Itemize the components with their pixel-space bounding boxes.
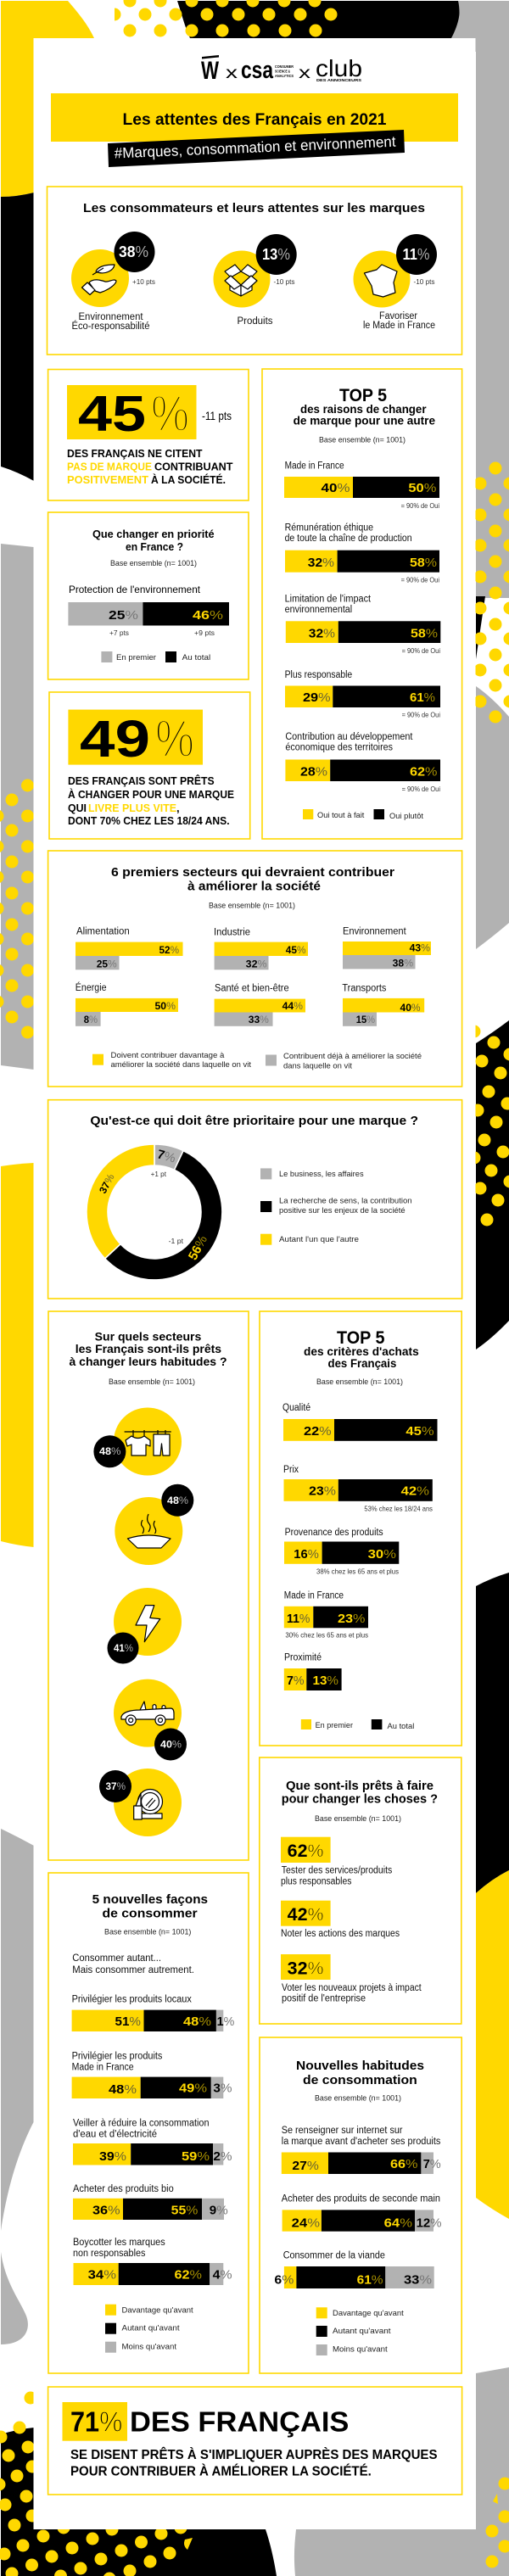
big number	[68, 710, 203, 768]
stat: 62%: 62%	[288, 1841, 324, 1861]
stat: environnement 38%: +10 pts	[132, 277, 155, 286]
heading: à améliorer la société	[187, 880, 321, 894]
bar: made in france: Made in France	[285, 461, 344, 472]
stat: 62%: Tester des services/produits	[282, 1866, 393, 1876]
bar: se renseigner: la marque avant d'acheter ses produits	[282, 2137, 441, 2147]
bars: environnement: 43%	[410, 942, 430, 954]
bar: proximité: Proximité	[284, 1652, 322, 1662]
statement	[68, 774, 234, 827]
stat: 32%: 32%	[288, 1959, 324, 1978]
heading	[111, 866, 394, 894]
bars: santé et bien-être: 44%	[282, 1000, 303, 1012]
bar: eau et électricité: 59%	[182, 2149, 210, 2164]
bar: provenance des produits: 30%	[368, 1547, 396, 1562]
logos: x	[226, 64, 238, 82]
legend: Autant qu'avant	[333, 2327, 391, 2336]
legend: Doivent contribuer davantage à	[110, 1051, 225, 1060]
bar: made in france: 48%	[109, 2082, 137, 2097]
bar: prix: 42%	[401, 1484, 429, 1498]
panel: que sont-ils prêts à faire: Base ensemble (n= 1001)	[315, 1814, 401, 1824]
bar: limitation de l'impact: 58%	[411, 626, 438, 641]
stat: 42%: 42%	[288, 1905, 324, 1925]
logos: W	[201, 57, 219, 85]
bar: contribution au développement: 62%	[410, 765, 438, 779]
bar: made in france: 49%	[179, 2081, 207, 2095]
bar: boycotter: 62%	[175, 2268, 202, 2283]
big number: %	[155, 710, 194, 768]
icon: lightning bolt	[136, 1606, 160, 1642]
stat: environnement 38%: 38%	[119, 243, 148, 260]
bar: produits bio: 9%	[210, 2203, 228, 2217]
legend	[260, 1168, 412, 1245]
legend: Au total	[387, 1722, 414, 1731]
big number: 45	[78, 386, 146, 442]
heading: 6 premiers secteurs qui devraient contribuer	[111, 866, 394, 880]
bar: prix: 53% chez les 18/24 ans	[364, 1504, 433, 1512]
panel: secteurs prêts à changer	[48, 1311, 249, 1860]
bar: boycotter: non responsables	[73, 2249, 146, 2259]
stat: made in france 11%: le Made in France	[363, 321, 435, 331]
logos	[201, 55, 362, 85]
heading	[92, 528, 215, 553]
heading: Sur quels secteurs	[95, 1329, 202, 1343]
heading: Les consommateurs et leurs attentes sur les marques	[83, 202, 425, 215]
headline: DES FRANÇAIS	[130, 2406, 349, 2438]
panel: que changer en priorité	[48, 512, 249, 679]
bar: se renseigner: 7%	[423, 2157, 441, 2171]
bar: contribution au développement: 28%	[300, 765, 327, 779]
panel: 5 nouvelles façons de consommer: Base ensemble (n= 1001)	[104, 1928, 191, 1937]
heading: 5 nouvelles façons	[92, 1893, 208, 1907]
bars: alimentation: Alimentation	[76, 927, 130, 937]
bar: plus responsable: = 90% de Oui	[402, 711, 440, 719]
stat: 62%	[281, 1837, 393, 1886]
big number: %	[151, 385, 189, 442]
legend: Moins qu'avant	[333, 2345, 388, 2355]
legend: Oui plutôt	[389, 812, 423, 821]
bar: viande: Consommer de la viande	[283, 2251, 385, 2261]
sector: cars 40%: 40%	[160, 1739, 182, 1751]
heading	[294, 386, 435, 427]
intro text: Consommer autant...	[72, 1953, 161, 1964]
bar: produits locaux: Privilégier les produits locaux	[72, 1994, 192, 2004]
bar chart: +9 pts	[194, 629, 215, 637]
bar: plus responsable: 61%	[410, 690, 435, 705]
heading: des raisons de changer	[300, 403, 427, 416]
statement: À CHANGER POUR UNE MARQUE	[68, 788, 234, 801]
bar: se renseigner: 66%	[390, 2157, 417, 2171]
sector: cars 40%	[114, 1679, 187, 1761]
logos: csa	[241, 57, 274, 84]
panel: secteurs prêts à changer: Base ensemble (n= 1001)	[109, 1377, 195, 1387]
legend: Moins qu'avant	[122, 2342, 176, 2351]
bars: environnement: 38%	[393, 957, 413, 969]
legend: améliorer la société dans laquelle on vit	[110, 1060, 251, 1070]
bar: eau et électricité: Veiller à réduire la consommation	[73, 2118, 209, 2128]
bar: rémunération éthique: 32%	[308, 556, 334, 570]
legend: Contribuent déjà à améliorer la société	[283, 1052, 422, 1061]
stat: environnement 38%: Environnement	[78, 312, 143, 322]
bar: provenance des produits: 38% chez les 65 ans et plus	[316, 1567, 399, 1576]
panel: top 5 raisons de changer de marque: Base ensemble (n= 1001)	[319, 435, 406, 444]
legend: Le business, les affaires	[279, 1170, 364, 1179]
bar: made in france: Made in France	[72, 2063, 134, 2073]
bar: proximité: 13%	[312, 1674, 338, 1688]
bar: limitation de l'impact: environnemental	[285, 605, 352, 615]
donut chart: 37%	[97, 1171, 117, 1195]
bars: énergie	[76, 982, 178, 1026]
legend: Davantage qu'avant	[333, 2309, 404, 2318]
sector: clothing 48%: 48%	[99, 1445, 121, 1457]
sector: energy 41%	[107, 1588, 182, 1664]
bar: qualité	[282, 1403, 438, 1441]
bar: made in france	[284, 461, 439, 510]
bar: made in france: Made in France	[284, 1591, 344, 1601]
legend	[105, 2305, 193, 2353]
bar: boycotter: Boycotter les marques	[73, 2238, 165, 2248]
donut chart: +1 pt	[151, 1170, 167, 1178]
panel: top 5 critères d'achats	[260, 1311, 461, 1746]
logos: SCIENCE &	[275, 70, 291, 73]
bar: viande: 33%	[404, 2273, 432, 2288]
bar: viande: 61%	[357, 2273, 383, 2288]
logos: CONSUMER	[275, 64, 294, 69]
bar: produits locaux: 1%	[217, 2014, 234, 2029]
bars: transports	[342, 984, 424, 1026]
stat: made in france 11%: -10 pts	[414, 277, 434, 286]
statement: CONTRIBUANT	[154, 460, 233, 473]
legend: En premier	[116, 653, 156, 662]
bars: alimentation: 52%	[159, 944, 179, 956]
bars: industrie: Industrie	[214, 928, 250, 938]
bar: qualité: 22%	[304, 1424, 332, 1439]
panel: nouvelles habitudes de consommation	[260, 2037, 461, 2373]
legend	[301, 1719, 414, 1731]
bar: prix: 23%	[309, 1484, 336, 1498]
stat: produits 13%: Produits	[238, 316, 273, 327]
bar: seconde main: 24%	[292, 2216, 320, 2231]
bar: qualité: Qualité	[282, 1403, 310, 1413]
stat: environnement 38%: Éco-responsabilité	[71, 321, 149, 332]
panel: 5 nouvelles façons de consommer	[48, 1873, 249, 2373]
icon: clothes line	[125, 1430, 171, 1456]
bars: transports: Transports	[342, 984, 387, 994]
bar: plus responsable: 29%	[303, 690, 331, 705]
subtitle tag: #Marques, consommation et environnement	[114, 133, 396, 161]
heading: des Français	[327, 1357, 396, 1370]
bars: industrie: 32%	[246, 958, 267, 970]
statement: DONT 70% CHEZ LES 18/24 ANS.	[68, 814, 230, 827]
bar: rémunération éthique: de toute la chaîne de production	[285, 534, 412, 544]
statement: ,	[176, 802, 180, 814]
heading	[296, 2059, 424, 2087]
stat: made in france 11%	[353, 234, 437, 331]
icon: hand and leaf	[81, 265, 116, 295]
title: Les attentes des Français en 2021	[122, 111, 387, 129]
bar: contribution au développement	[285, 732, 440, 793]
bar: se renseigner	[282, 2126, 441, 2174]
stat: produits 13%	[214, 234, 297, 327]
bar: rémunération éthique: Rémunération éthique	[285, 523, 373, 534]
sector: energy 41%: 41%	[114, 1642, 133, 1654]
panel: priorité pour une marque	[48, 1100, 462, 1299]
heading	[92, 1893, 208, 1921]
big number: 49	[80, 710, 150, 768]
panel: consumer expectations	[48, 187, 461, 355]
heading: Qu'est-ce qui doit être prioritaire pour une marque ?	[90, 1115, 418, 1128]
bar: rémunération éthique: 58%	[410, 556, 437, 570]
bar: provenance des produits	[284, 1528, 399, 1576]
heading: de marque pour une autre	[294, 415, 435, 427]
heading	[304, 1328, 419, 1370]
bar: produits bio	[73, 2184, 228, 2220]
heading: TOP 5	[339, 386, 387, 405]
bar: boycotter: 34%	[88, 2268, 116, 2283]
heading	[282, 1780, 438, 1807]
legend: La recherche de sens, la contribution	[279, 1196, 412, 1206]
heading: Nouvelles habitudes	[296, 2059, 424, 2073]
panel: top 5 raisons de changer de marque	[262, 369, 462, 839]
stat: 42%: Noter les actions des marques	[281, 1929, 400, 1939]
heading: des critères d'achats	[304, 1345, 419, 1358]
bars: santé et bien-être: 33%	[249, 1014, 269, 1025]
bar: made in france: 3%	[213, 2081, 232, 2095]
bars: énergie: Énergie	[76, 982, 107, 993]
bar: made in france: 23%	[338, 1612, 365, 1626]
bars: industrie	[214, 928, 308, 970]
logos: DES ANNONCEURS	[316, 78, 361, 82]
bar: qualité: 45%	[406, 1424, 434, 1439]
title banner	[51, 93, 458, 142]
stat: 62%: plus responsables	[281, 1876, 352, 1886]
bars: environnement	[343, 927, 431, 969]
logos: ANALYTICS	[275, 74, 294, 78]
sector: clothing 48%	[93, 1408, 182, 1476]
bars: alimentation	[76, 927, 183, 970]
stat: 42%	[281, 1901, 400, 1939]
bar: limitation de l'impact: Limitation de l'impact	[285, 594, 372, 604]
big number	[63, 2402, 127, 2441]
bars: industrie: 45%	[286, 944, 306, 956]
statement: POUR CONTRIBUER À AMÉLIORER LA SOCIÉTÉ.	[70, 2463, 372, 2479]
bar: seconde main: 12%	[417, 2216, 441, 2231]
bar: made in france: 11%	[287, 1612, 310, 1626]
statement	[67, 447, 233, 486]
big number	[67, 385, 197, 442]
stat: made in france 11%: Favoriser	[379, 311, 417, 321]
heading: les Français sont-ils prêts	[76, 1342, 221, 1355]
icon: open box	[225, 265, 257, 296]
sector: cosmetics 37%	[99, 1769, 182, 1836]
legend	[92, 1051, 422, 1071]
bar: made in france: 30% chez les 65 ans et plus	[285, 1630, 368, 1639]
donut chart	[87, 1144, 222, 1280]
legend	[316, 2307, 404, 2355]
stat: environnement 38%	[71, 232, 155, 332]
bar: se renseigner: Se renseigner sur internet sur	[282, 2126, 403, 2136]
statement: QUI	[68, 802, 87, 814]
bar: made in france: 50%	[408, 481, 436, 495]
bar: rémunération éthique: = 90% de Oui	[401, 575, 439, 584]
heading: Que sont-ils prêts à faire	[286, 1780, 433, 1793]
bars: transports: 40%	[400, 1002, 421, 1014]
bar: contribution au développement: = 90% de Oui	[402, 785, 440, 793]
heading	[70, 1329, 227, 1368]
bars: transports: 15%	[356, 1014, 375, 1025]
stat: produits 13%: -10 pts	[273, 277, 295, 286]
stat: produits 13%: 13%	[262, 246, 290, 263]
legend: Autant l'un que l'autre	[279, 1235, 359, 1244]
statement	[70, 2446, 438, 2479]
legend: Au total	[182, 653, 210, 662]
heading: de consommation	[303, 2074, 417, 2087]
donut chart: 7%	[155, 1148, 177, 1166]
bar: prix	[283, 1465, 433, 1512]
heading: de consommer	[102, 1908, 198, 1921]
donut chart: -1 pt	[169, 1237, 184, 1245]
bar chart: 25%	[109, 608, 138, 623]
bar: eau et électricité: 39%	[99, 2149, 126, 2164]
stat: 32%: Voter les nouveaux projets à impact	[282, 1983, 422, 1993]
legend	[303, 809, 423, 821]
bars: énergie: 8%	[84, 1014, 98, 1025]
heading: Que changer en priorité	[92, 528, 215, 540]
bar: produits bio: 55%	[171, 2203, 198, 2217]
panel: 6 premiers secteurs	[48, 851, 462, 1087]
heading: à changer leurs habitudes ?	[70, 1355, 227, 1368]
bar: produits locaux: 51%	[115, 2014, 141, 2029]
statement: À LA SOCIÉTÉ.	[151, 473, 226, 486]
bar: contribution au développement: Contribution au développement	[285, 732, 413, 742]
icon: mirror and lipstick	[134, 1790, 163, 1819]
bar: made in france: = 90% de Oui	[401, 501, 439, 510]
bars: alimentation: 25%	[97, 958, 117, 970]
statement: SE DISENT PRÊTS À S'IMPLIQUER AUPRÈS DES MARQUES	[70, 2446, 438, 2462]
bar: contribution au développement: économique des territoires	[285, 743, 393, 753]
bars: énergie: 50%	[154, 1000, 176, 1012]
bars: santé et bien-être: Santé et bien-être	[215, 984, 289, 994]
legend: En premier	[316, 1721, 353, 1730]
icon: plate with steam	[127, 1514, 171, 1548]
bar: seconde main: Acheter des produits de seconde main	[282, 2194, 440, 2204]
statement: POSITIVEMENT	[67, 473, 148, 486]
bar: provenance des produits: 16%	[294, 1547, 319, 1562]
sector: cosmetics 37%: 37%	[105, 1780, 126, 1792]
intro text	[72, 1953, 194, 1975]
panel: que changer en priorité: Base ensemble (n= 1001)	[110, 559, 197, 568]
bar chart	[68, 602, 229, 637]
icon: convertible car	[121, 1702, 174, 1725]
bar: made in france	[72, 2051, 232, 2098]
bar chart: +7 pts	[109, 629, 129, 637]
legend: Oui tout à fait	[317, 811, 365, 820]
donut chart: 56%	[186, 1233, 210, 1262]
bar: made in france	[284, 1591, 368, 1639]
bar: produits locaux: 48%	[183, 2014, 211, 2029]
bars: environnement: Environnement	[343, 927, 406, 937]
panel: 71% conclusion	[48, 2387, 462, 2495]
sector: food 48%	[115, 1484, 193, 1565]
statement: PAS DE MARQUE	[67, 460, 152, 473]
stat: 32%	[281, 1954, 422, 2004]
panel: 45%	[48, 370, 249, 500]
bar: seconde main	[282, 2194, 441, 2232]
bar: rémunération éthique	[285, 523, 439, 584]
panel: top 5 critères d'achats: Base ensemble (n= 1001)	[316, 1377, 403, 1387]
heading: TOP 5	[337, 1328, 385, 1348]
legend: dans laquelle on vit	[283, 1062, 352, 1071]
panel: 6 premiers secteurs: Base ensemble (n= 1001)	[209, 901, 295, 910]
bar: made in france: Privilégier les produits	[72, 2051, 163, 2061]
panel: 49%	[49, 692, 250, 839]
bar: limitation de l'impact: = 90% de Oui	[402, 646, 440, 655]
statement: DES FRANÇAIS SONT PRÊTS	[68, 774, 215, 787]
bar: eau et électricité: 2%	[213, 2149, 232, 2164]
bar: viande	[274, 2251, 434, 2288]
panel: que sont-ils prêts à faire	[260, 1757, 461, 2024]
bar: eau et électricité	[73, 2118, 232, 2165]
bar: limitation de l'impact: 32%	[309, 626, 335, 641]
bar: provenance des produits: Provenance des produits	[285, 1528, 383, 1538]
legend: positive sur les enjeux de la société	[279, 1206, 406, 1215]
bar: seconde main: 64%	[384, 2216, 412, 2231]
panel: nouvelles habitudes de consommation: Base ensemble (n= 1001)	[315, 2093, 401, 2103]
logos: x	[299, 64, 311, 82]
legend	[101, 651, 210, 662]
statement: LIVRE PLUS VITE	[88, 802, 176, 814]
icon: map of France	[364, 265, 397, 297]
bar: limitation de l'impact	[285, 594, 440, 655]
stat: made in france 11%: 11%	[402, 246, 429, 263]
legend: Autant qu'avant	[122, 2324, 180, 2333]
bar: se renseigner: 27%	[292, 2159, 319, 2173]
bar: produits bio: Acheter des produits bio	[73, 2184, 174, 2194]
heading: en France ?	[126, 540, 183, 553]
bar: plus responsable: Plus responsable	[285, 670, 352, 680]
stat: 32%: positif de l'entreprise	[282, 1994, 366, 2004]
bar: produits locaux	[72, 1994, 234, 2031]
sector: food 48%: 48%	[167, 1495, 188, 1506]
legend: Davantage qu'avant	[122, 2306, 193, 2316]
bar: produits bio: 36%	[92, 2203, 120, 2217]
bar: proximité: 7%	[287, 1674, 305, 1688]
panel: que changer en priorité: Protection de l'environnement	[69, 584, 201, 595]
bar: plus responsable	[285, 670, 440, 719]
bar: proximité	[284, 1652, 342, 1690]
statement: DES FRANÇAIS NE CITENT	[67, 447, 203, 460]
bar: made in france: 40%	[321, 481, 350, 495]
bar: boycotter: 4%	[213, 2268, 232, 2283]
panel: 45%: -11 pts	[202, 409, 232, 422]
intro text: Mais consommer autrement.	[72, 1965, 194, 1975]
bar chart: 46%	[193, 608, 223, 623]
heading: pour changer les choses ?	[282, 1793, 438, 1807]
bar: boycotter	[73, 2238, 232, 2285]
big number: 71%	[70, 2406, 122, 2438]
bar: eau et électricité: d'eau et d'électricité	[73, 2129, 157, 2139]
bar: prix: Prix	[283, 1465, 299, 1475]
bars: santé et bien-être	[215, 984, 305, 1026]
bar: viande: 6%	[274, 2273, 294, 2288]
logos: club	[316, 55, 362, 81]
